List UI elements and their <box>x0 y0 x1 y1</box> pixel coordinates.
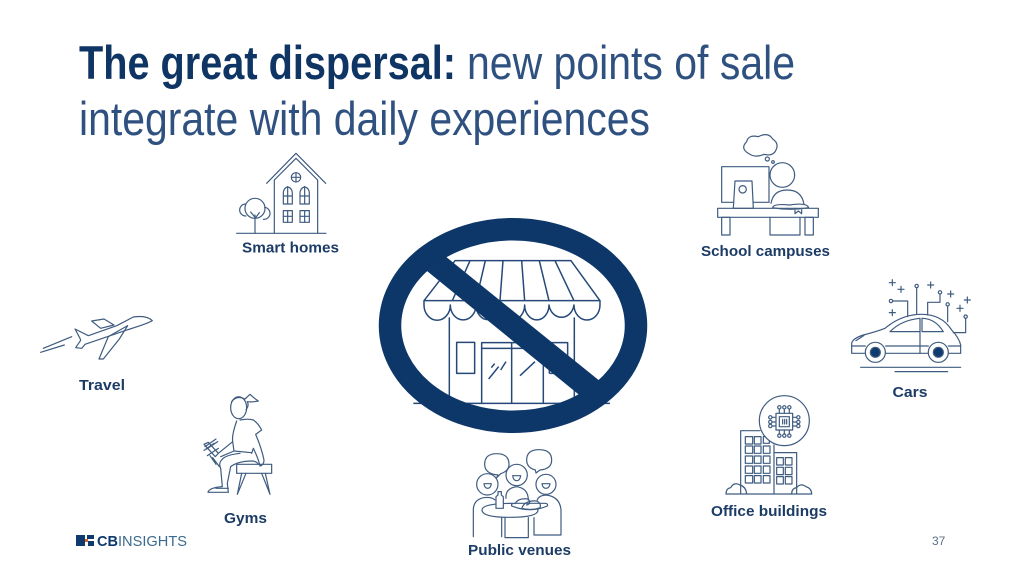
icon: school campuses <box>718 135 818 235</box>
icon: office buildings <box>726 396 812 494</box>
logo: CB Insights: INSIGHTS <box>118 533 187 550</box>
title: The great dispersal: <box>79 36 456 89</box>
page number: 37 <box>932 534 946 548</box>
label: gyms: Gyms <box>224 511 267 527</box>
label: public venues: Public venues <box>468 543 571 559</box>
icon: public venues <box>473 450 561 538</box>
label: travel: Travel <box>79 378 125 394</box>
storefront <box>413 261 610 403</box>
icon: no storefront <box>390 229 636 422</box>
label: school campuses: School campuses <box>701 244 830 260</box>
icon: travel <box>41 316 152 359</box>
prohibition sign <box>390 229 636 422</box>
label: cars: Cars <box>892 385 928 401</box>
logo: CB Insights: CB <box>97 533 118 550</box>
title <box>79 36 795 145</box>
title: new points of sale <box>467 36 795 89</box>
icon: gyms <box>204 394 272 494</box>
logo: CB Insights <box>76 533 187 550</box>
label: smart homes: Smart homes <box>242 240 339 256</box>
label: office buildings: Office buildings <box>711 504 827 520</box>
title: integrate with daily experiences <box>79 92 650 145</box>
icon: smart homes <box>237 153 326 233</box>
logo mark <box>76 535 94 546</box>
icon: cars <box>852 280 970 372</box>
